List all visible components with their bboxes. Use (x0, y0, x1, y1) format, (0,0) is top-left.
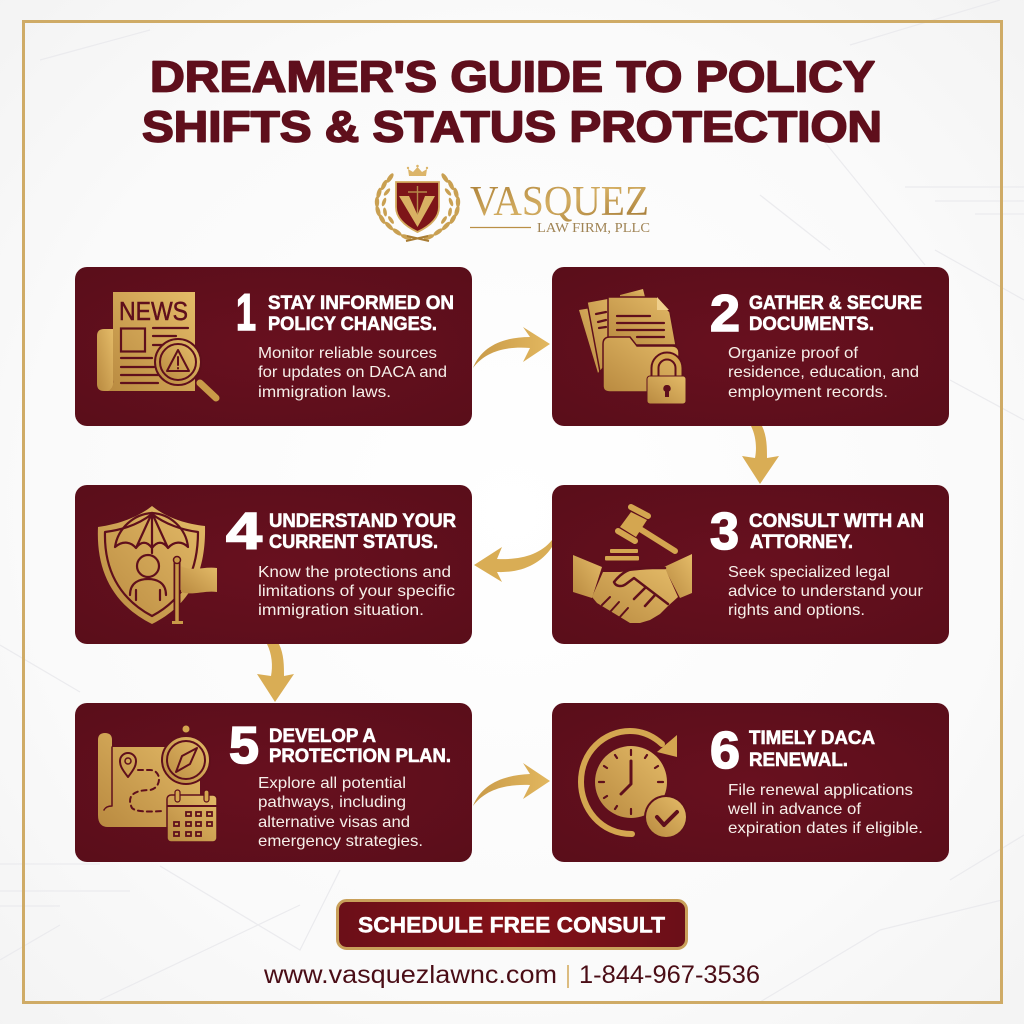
step heading: DEVELOP A (269, 726, 376, 747)
title: SHIFTS & STATUS PROTECTION (142, 102, 882, 152)
step heading: CURRENT STATUS. (269, 532, 438, 553)
panel: step 5 (75, 703, 472, 862)
step heading (749, 728, 875, 771)
step heading (268, 293, 454, 335)
panel: step 4 (75, 485, 472, 644)
step description (258, 345, 447, 401)
company name: LAW FIRM, PLLC (537, 220, 650, 235)
title: DREAMER'S GUIDE TO POLICY (150, 52, 875, 102)
arrow: step 2 to step 3 (742, 426, 779, 484)
contact line: www.vasquezlawnc.com (263, 961, 557, 989)
step description (258, 775, 423, 850)
step description: residence, education, and (728, 364, 919, 381)
step heading (269, 511, 456, 553)
step description: alternative visas and (258, 814, 410, 831)
step heading: DOCUMENTS. (749, 314, 874, 335)
step number: 2 (710, 285, 740, 343)
step description: Know the protections and (258, 564, 451, 581)
contact line (263, 961, 760, 989)
step number: 6 (710, 722, 740, 780)
step heading (269, 726, 451, 767)
step description: advice to understand your (728, 583, 924, 600)
panel: step 1 (75, 267, 472, 426)
step heading: PROTECTION PLAN. (269, 746, 451, 767)
firm logo (374, 165, 650, 241)
title (142, 52, 882, 152)
icon: newspaper with magnifier (97, 292, 216, 398)
step heading (749, 293, 922, 335)
icon: newspaper with magnifier: NEWS (119, 296, 188, 326)
step description: pathways, including (258, 794, 406, 811)
step heading: ATTORNEY. (750, 532, 853, 553)
contact line: 1-844-967-3536 (579, 961, 760, 989)
panel: step 6 (552, 703, 949, 862)
panel: step 2 (552, 267, 949, 426)
step heading: GATHER & SECURE (749, 293, 922, 314)
step description: immigration laws. (258, 384, 391, 401)
step number: 5 (229, 717, 259, 775)
step heading (749, 511, 924, 553)
step description (728, 564, 924, 619)
step description: expiration dates if eligible. (728, 820, 923, 837)
step description: Monitor reliable sources (258, 345, 437, 362)
step description: rights and options. (728, 602, 865, 619)
icon: clock with renewal arrow and check (581, 731, 688, 839)
call to action button: SCHEDULE FREE CONSULT (358, 912, 666, 938)
icon: shield with umbrella, person and flag (98, 506, 217, 624)
step description: emergency strategies. (258, 833, 423, 850)
arrow: step 5 to step 6 (473, 763, 550, 806)
step heading: RENEWAL. (749, 750, 848, 771)
step number: 1 (236, 284, 256, 342)
step description: employment records. (728, 384, 888, 401)
step description (727, 782, 923, 837)
panel: step 3 (552, 485, 949, 644)
icon: map, compass and calendar (98, 726, 217, 842)
arrow: step 3 to step 4 (474, 540, 552, 582)
icon: folder with documents and lock (579, 289, 686, 404)
step description: well in advance of (727, 801, 862, 818)
step heading: POLICY CHANGES. (268, 314, 437, 335)
step description: immigration situation. (258, 602, 424, 619)
step description: File renewal applications (728, 782, 913, 799)
step description (728, 345, 919, 401)
step heading: UNDERSTAND YOUR (269, 511, 456, 532)
icon: gavel and handshake (573, 507, 692, 623)
step description (258, 564, 455, 619)
step description: for updates on DACA and (258, 364, 447, 381)
step number: 4 (226, 503, 262, 561)
arrow: step 4 to step 5 (257, 644, 294, 702)
company name: VASQUEZ (470, 179, 649, 225)
call to action button (338, 900, 686, 948)
arrow: step 1 to step 2 (473, 327, 550, 368)
step heading: CONSULT WITH AN (749, 511, 924, 532)
icon: shield (396, 182, 439, 232)
icon: crown (407, 165, 428, 176)
icon: laurel wreath (374, 172, 461, 241)
step description: Organize proof of (728, 345, 859, 362)
step description: limitations of your specific (258, 583, 455, 600)
step heading: TIMELY DACA (749, 728, 875, 749)
step description: Seek specialized legal (728, 564, 890, 581)
step number: 3 (710, 503, 739, 561)
step description: Explore all potential (258, 775, 406, 792)
step heading: STAY INFORMED ON (268, 293, 454, 314)
